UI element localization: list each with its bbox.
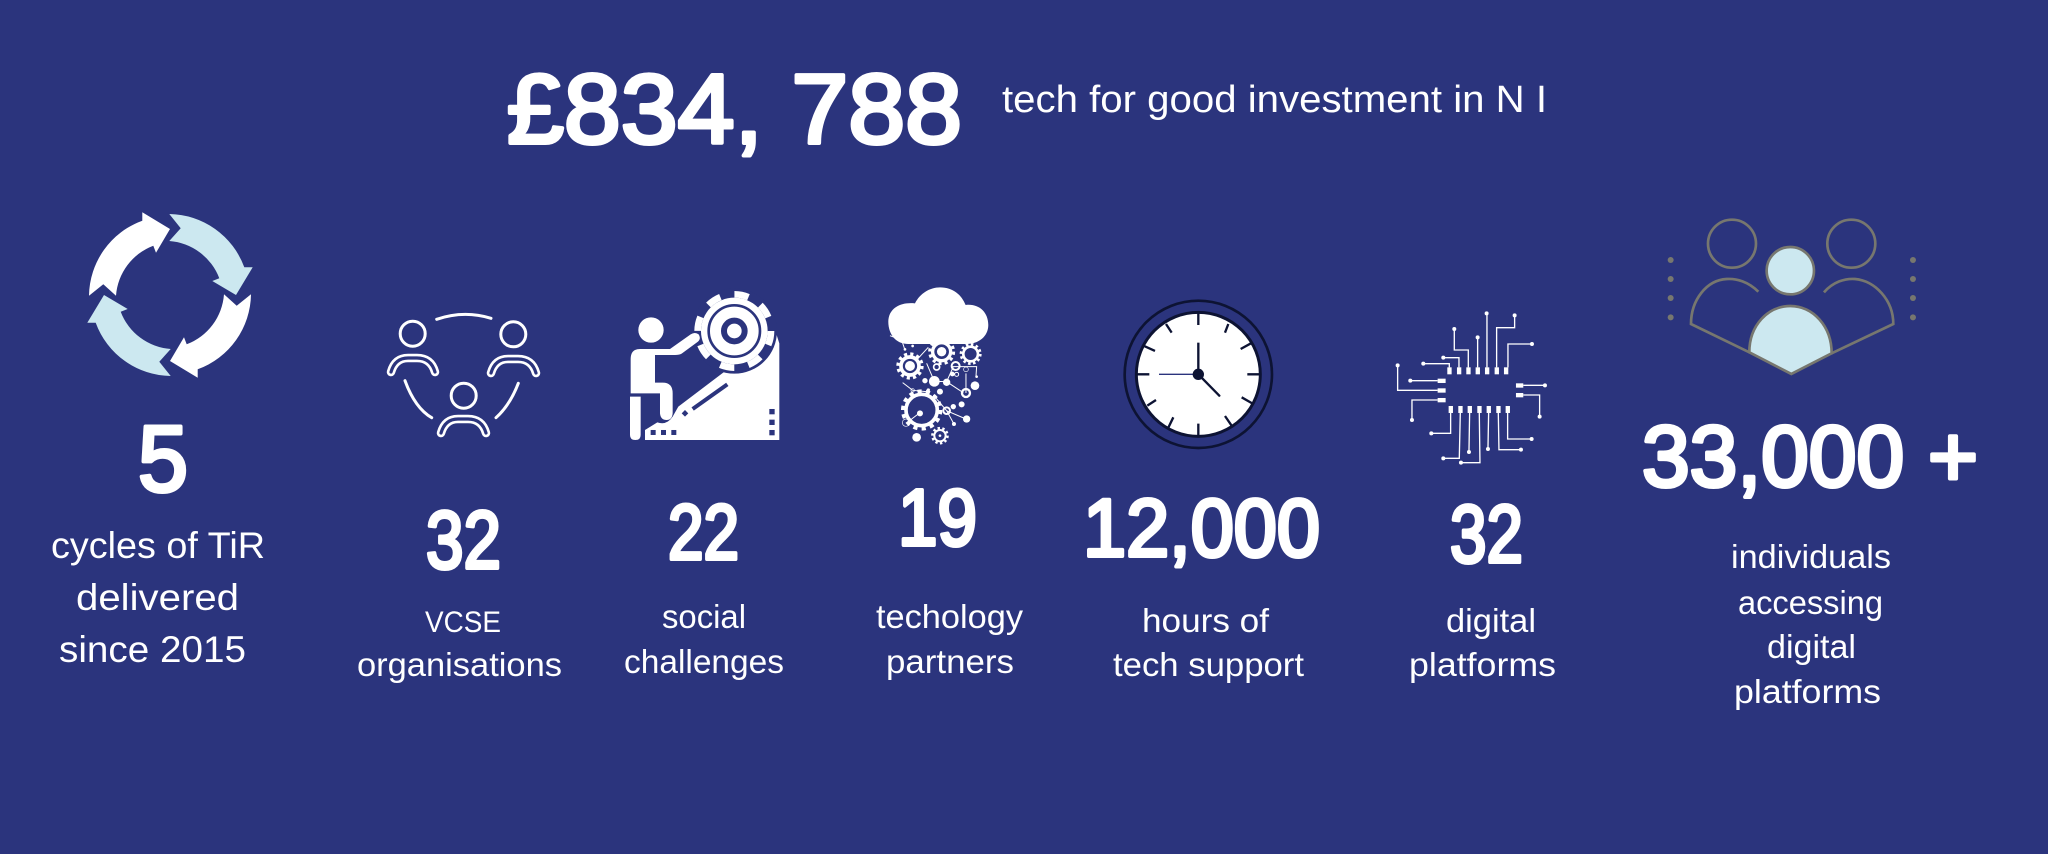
panel: VCSE organisations — [357, 314, 562, 683]
label: individuals accessing digital platforms: digital — [1767, 628, 1856, 665]
headline caption: tech for good investment in N I — [1002, 79, 1547, 121]
headline figure: £834, 788 — [507, 54, 962, 164]
icon: group of people — [1668, 220, 1916, 374]
label: cycles of TiR: delivered — [76, 577, 239, 618]
number: 12,000: 12,000 — [1083, 483, 1320, 574]
label: individuals accessing digital platforms: individuals — [1731, 538, 1891, 575]
label: technology partners: techology — [876, 598, 1024, 635]
label: hours of tech support: tech support — [1113, 646, 1304, 683]
label: digital platforms: digital — [1446, 602, 1536, 639]
label: technology partners — [876, 598, 1024, 680]
label: individuals accessing digital platforms — [1731, 538, 1891, 710]
label: VCSE organisations: VCSE — [425, 606, 501, 639]
panel: hours of tech support — [1083, 301, 1320, 683]
label: digital platforms: platforms — [1409, 646, 1556, 683]
label: hours of tech support — [1113, 602, 1304, 683]
label: social challenges — [624, 598, 784, 680]
panel: digital platforms — [1396, 311, 1556, 683]
panel: social challenges — [624, 288, 784, 680]
heading: investment total — [507, 54, 1547, 164]
label: cycles of TiR: cycles of TiR — [51, 525, 265, 566]
label: social challenges: challenges — [624, 643, 784, 680]
label: VCSE organisations — [357, 606, 562, 683]
number: 32: 32 — [426, 495, 501, 586]
label: individuals accessing digital platforms: platforms — [1734, 673, 1881, 710]
label: digital platforms — [1409, 602, 1556, 683]
label: cycles of TiR: since 2015 — [59, 629, 246, 670]
icon: connected people — [391, 314, 536, 433]
icon: circuit chip — [1396, 311, 1547, 465]
label: VCSE organisations: organisations — [357, 646, 562, 683]
panel: technology partners — [876, 287, 1024, 680]
label: social challenges: social — [662, 598, 746, 635]
label: technology partners: partners — [886, 643, 1014, 680]
number: 32: 32 — [1450, 489, 1523, 580]
icon: circular arrows — [87, 212, 253, 378]
label: individuals accessing digital platforms: accessing — [1738, 584, 1883, 621]
label: hours of tech support: hours of — [1142, 602, 1270, 639]
panel: cycles of TiR — [51, 212, 265, 670]
number: 22: 22 — [668, 488, 739, 576]
number: 5: 5 — [138, 406, 188, 511]
number: 19: 19 — [898, 473, 977, 562]
label: cycles of TiR — [51, 525, 265, 670]
icon: person climbing to gear — [630, 288, 779, 440]
icon: cloud with gears — [888, 287, 988, 443]
icon: clock — [1125, 301, 1272, 448]
panel: individuals accessing digital platforms — [1642, 220, 1978, 710]
number: 33,000 +: 33,000 + — [1642, 409, 1978, 505]
